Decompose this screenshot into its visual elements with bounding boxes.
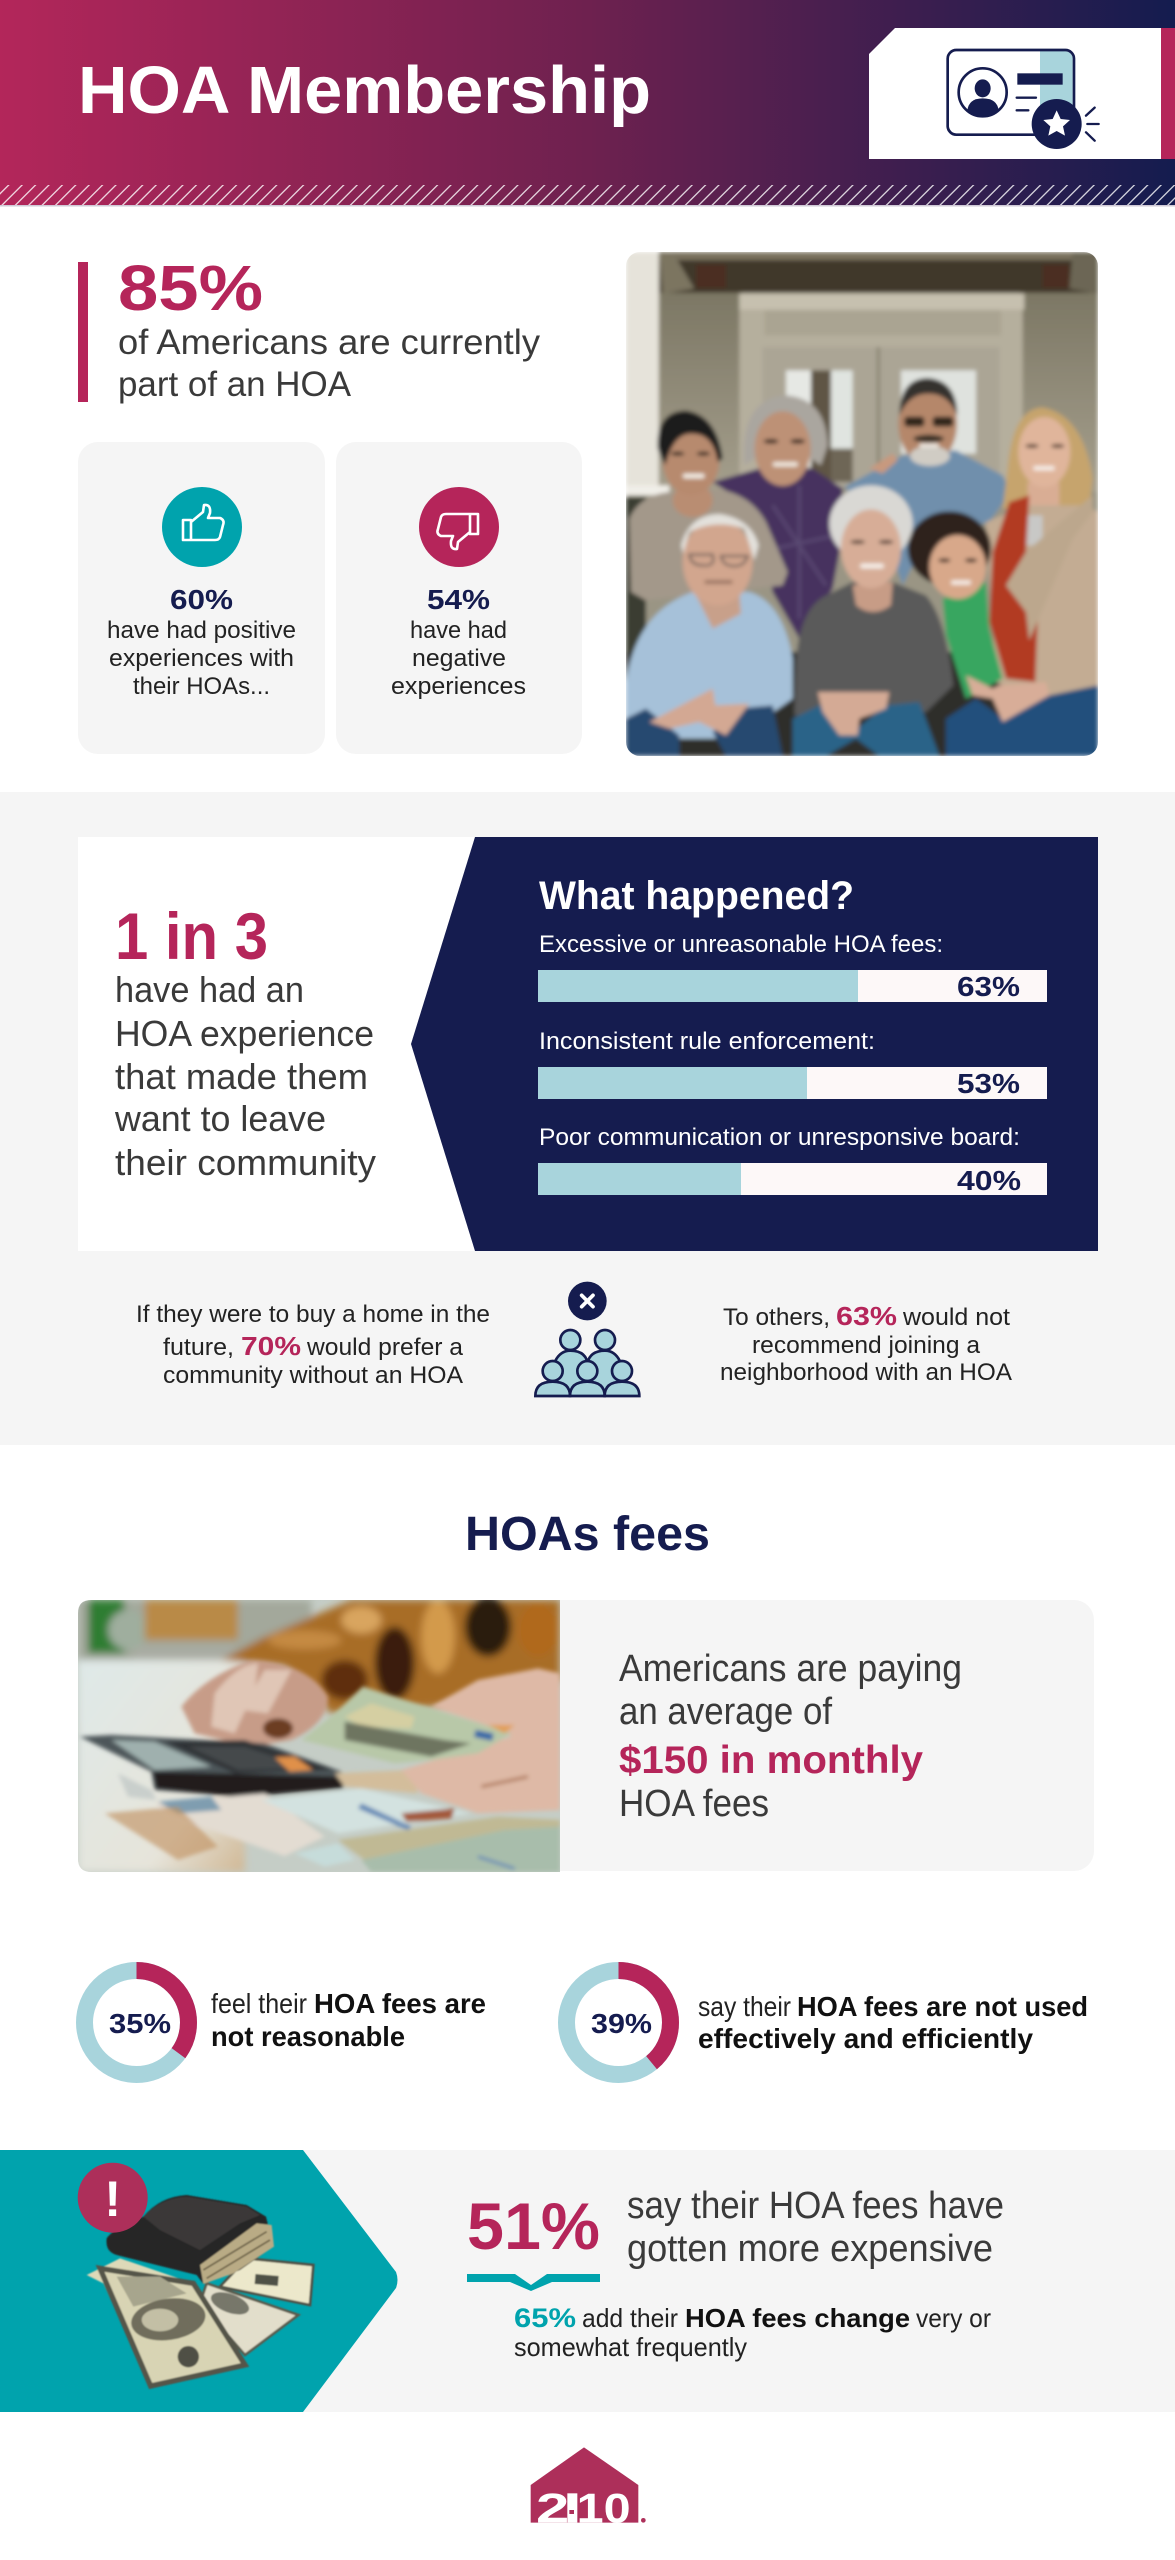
donut: 35%: 35% xyxy=(109,2008,171,2039)
bar: excessive fees xyxy=(538,931,1047,1002)
text: would not recommend xyxy=(720,1301,1012,1386)
panel: 1 in 3: 1 in 3 xyxy=(115,899,268,973)
stat: 85% of Americans xyxy=(78,252,541,404)
band: fees getting more expensive xyxy=(0,2150,1175,2412)
heading: what happened: What happened? xyxy=(539,874,854,918)
panel: 1 in 3: their community xyxy=(115,1142,376,1183)
back row xyxy=(844,450,1011,585)
text: buy a home: If they were to buy a home in the xyxy=(136,1301,490,1328)
donut: 35% xyxy=(84,1970,188,2074)
bar: poor communication: 40% xyxy=(957,1165,1021,1196)
donut: 39%: 39% xyxy=(591,2008,652,2039)
logo: 2-10: 2 xyxy=(536,2485,569,2532)
card: negative experiences xyxy=(336,442,582,754)
text: fees not used effectively: say their xyxy=(698,1991,791,2022)
text: more expensive: gotten more expensive xyxy=(627,2228,993,2270)
text: fees change frequently xyxy=(514,2303,991,2362)
card: positive experiences xyxy=(78,442,325,754)
text: fees not used effectively xyxy=(698,1991,1088,2054)
child xyxy=(908,511,991,586)
icon: group of people with x xyxy=(535,1282,639,1396)
icon: alert: ! xyxy=(104,2171,121,2227)
illustration: wallet and dollar bills xyxy=(87,2195,313,2386)
bar: excessive fees: 63% xyxy=(957,971,1020,1002)
woman centre xyxy=(829,485,913,562)
text: fees change frequently: somewhat frequently xyxy=(514,2332,747,2362)
bar: rule enforcement: Inconsistent rule enforcement: xyxy=(539,1028,875,1055)
stat: 51%: 51% xyxy=(467,2189,600,2263)
icon: thumbs up xyxy=(162,487,242,567)
text: would not recommend: would not xyxy=(902,1304,1010,1331)
panel: 1 in 3: want to leave xyxy=(114,1098,326,1139)
text: average monthly fee: $150 in monthly xyxy=(619,1739,923,1782)
icon panel: membership card xyxy=(869,28,1175,159)
card: positive experiences: experiences with xyxy=(109,645,294,672)
icon: membership card with star xyxy=(948,50,1099,149)
woman right xyxy=(1003,407,1093,509)
text: buy a home: would prefer a xyxy=(306,1334,464,1361)
text: would not recommend: 63% xyxy=(836,1301,897,1331)
donut: 39% xyxy=(566,1970,670,2074)
panel: 1 in 3 xyxy=(78,837,476,1251)
text: buy a home: community without an HOA xyxy=(163,1362,463,1389)
panel: what happened bar chart xyxy=(411,837,1098,1251)
text: buy a home xyxy=(136,1301,490,1389)
header banner xyxy=(0,0,1175,206)
text: more expensive xyxy=(627,2185,1004,2270)
photo: hands counting money with calculator xyxy=(78,1597,560,1872)
text: would not recommend: recommend joining a xyxy=(752,1332,981,1359)
text: average monthly fee: HOA fees xyxy=(619,1783,769,1825)
panel: 1 in 3: HOA experience xyxy=(115,1013,374,1054)
card: negative experiences: negative xyxy=(412,645,506,672)
text: fees change frequently: HOA fees change xyxy=(685,2303,910,2333)
card: negative experiences: 54% xyxy=(427,584,490,615)
icon: thumbs down xyxy=(419,487,499,567)
section background: leave community xyxy=(0,792,1175,1445)
icon: alert xyxy=(78,2163,148,2233)
text: fees not used effectively: HOA fees are not used xyxy=(797,1991,1088,2022)
text: fees change frequently: 65% xyxy=(514,2303,576,2333)
card: negative experiences: have had xyxy=(410,617,507,644)
text: fees change frequently: add their xyxy=(582,2303,678,2333)
panel: 1 in 3: have had an xyxy=(115,969,304,1010)
text: fees change frequently: very or xyxy=(916,2303,991,2333)
title: HOA Membership xyxy=(78,53,651,128)
bar: rule enforcement: 53% xyxy=(957,1068,1020,1099)
text: would not recommend: To others, xyxy=(723,1304,830,1331)
text: average monthly fee xyxy=(619,1648,962,1825)
logo: 2-10: 10 xyxy=(577,2485,631,2532)
text: fees not reasonable: not reasonable xyxy=(211,2021,405,2052)
text: fees not reasonable: HOA fees are xyxy=(314,1988,486,2019)
panel: 1 in 3: that made them xyxy=(115,1056,368,1097)
stat: 85% of Americans: 85% xyxy=(118,252,263,324)
bar: poor communication: Poor communication or unresponsive board: xyxy=(539,1124,1020,1151)
logo: 2-10 xyxy=(531,2447,646,2532)
stat: 85% of Americans: of Americans are currently xyxy=(118,323,541,362)
heading: HOAs fees: HOAs fees xyxy=(465,1508,710,1561)
text: fees not reasonable xyxy=(211,1988,486,2052)
card: negative experiences: experiences xyxy=(391,673,526,700)
card: positive experiences: 60% xyxy=(170,584,233,615)
text: fees not used effectively: effectively and efficiently xyxy=(698,2023,1033,2054)
card: positive experiences: their HOAs... xyxy=(133,673,270,700)
bar: excessive fees: Excessive or unreasonable HOA fees: xyxy=(539,931,943,958)
text: average monthly fee: an average of xyxy=(619,1691,832,1733)
card: positive experiences: have had positive xyxy=(107,617,296,644)
text: fees not reasonable: feel their xyxy=(211,1988,307,2019)
man front xyxy=(626,592,793,739)
text: buy a home: future, xyxy=(163,1334,234,1361)
bar: rule enforcement xyxy=(538,1028,1047,1099)
jeans xyxy=(626,705,783,756)
text: more expensive: say their HOA fees have xyxy=(627,2185,1004,2227)
text: would not recommend: neighborhood with an HOA xyxy=(720,1359,1012,1386)
bar: poor communication xyxy=(538,1124,1047,1196)
photo: family in front of home xyxy=(626,252,1098,756)
text: average monthly fee: Americans are paying xyxy=(619,1648,962,1690)
text: buy a home: 70% xyxy=(241,1331,301,1361)
panel: average monthly fees xyxy=(78,1597,1094,1872)
stat: 85% of Americans: part of an HOA xyxy=(118,365,352,404)
